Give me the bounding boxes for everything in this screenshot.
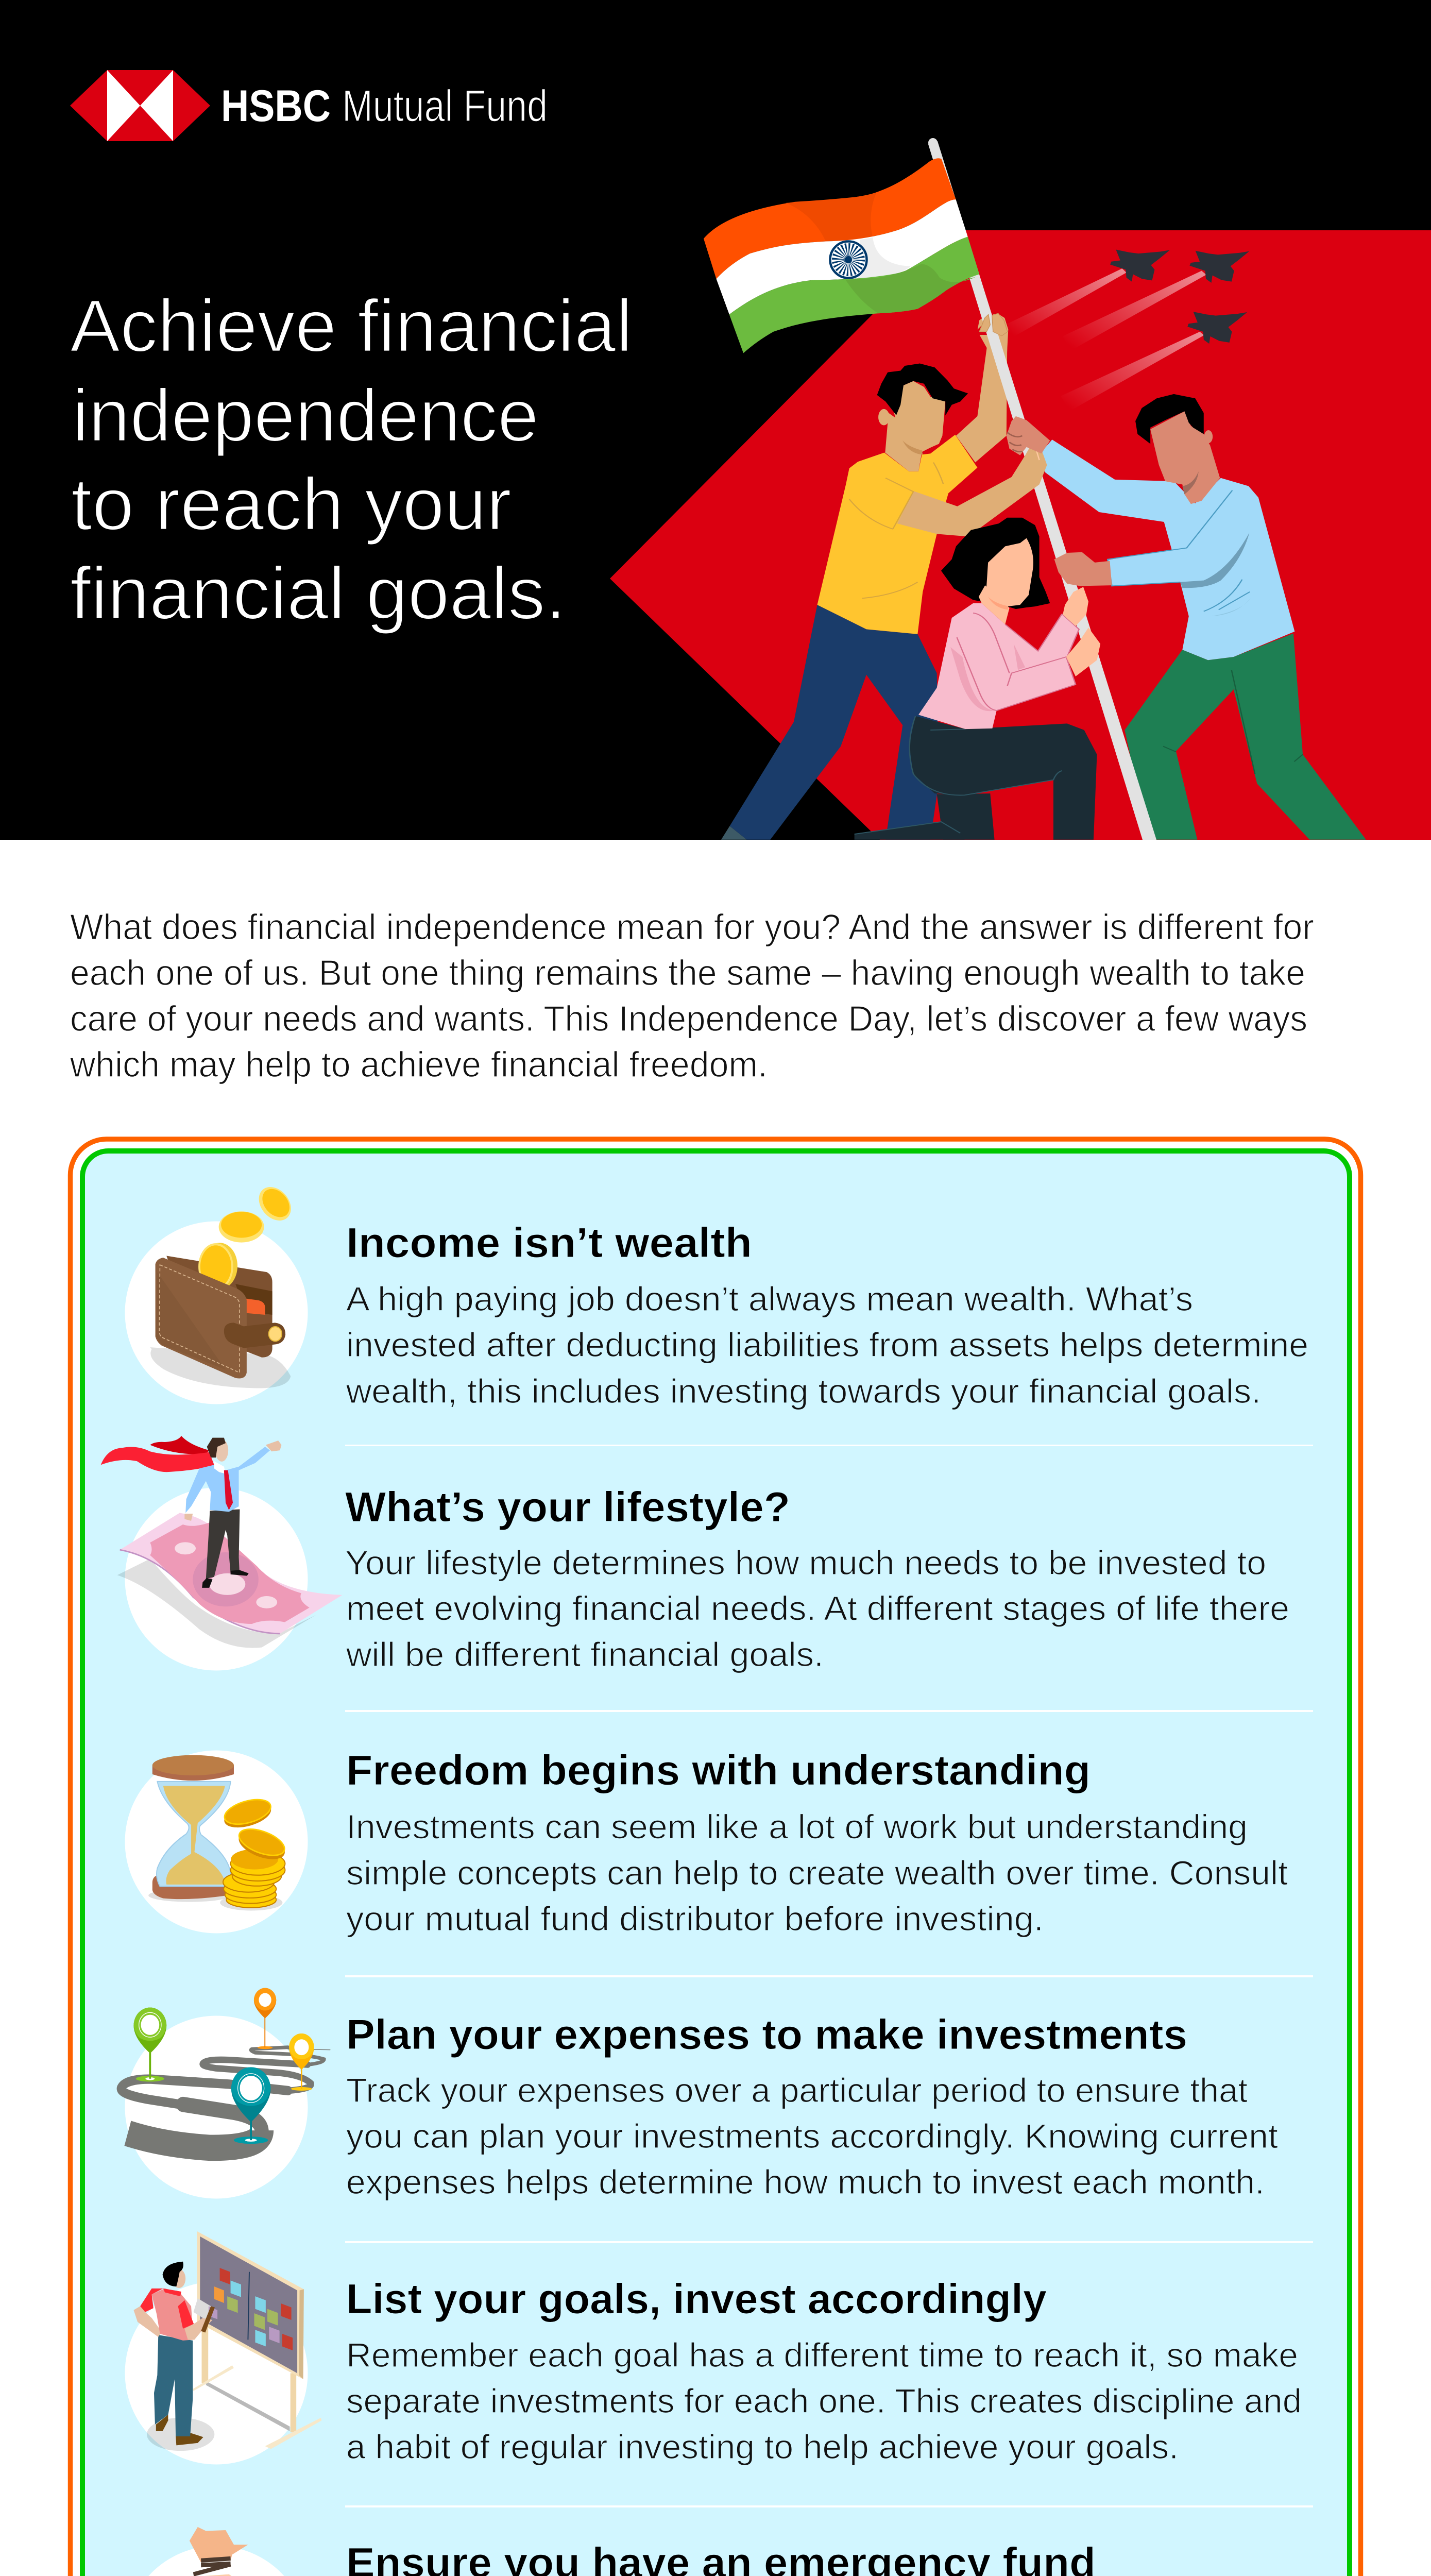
panel: tips with tricolour border — [70, 1139, 1361, 2576]
illustration: Indian flag — [704, 158, 979, 353]
heading and text: Freedom begins with understanding: Freedom begins with understanding — [346, 1747, 1091, 1794]
heading and text: Plan your expenses — [346, 2011, 1278, 2201]
divider 4 — [345, 2241, 1313, 2243]
logo: wordmark: Mutual Fund — [342, 81, 548, 131]
title: financial goals. — [70, 552, 566, 635]
illustration: man in blue shirt — [1042, 394, 1366, 840]
pin teal — [231, 2067, 270, 2144]
hero red hexagon shape — [610, 230, 1431, 840]
icon: money bag on lifebuoy — [139, 2527, 293, 2576]
heading and text: Income isn't wealth — [346, 1219, 1308, 1410]
heading and text: Income isn't wealth: Income isn’t wealth — [346, 1219, 752, 1266]
heading and text: Plan your expenses: expenses helps determine how much to invest each month. — [346, 2163, 1265, 2201]
divider 3 — [345, 1975, 1313, 1977]
panel green inner border and fill — [82, 1151, 1350, 2576]
heading and text: Income isn't wealth: A high paying job doesn’t always mean wealth. What’s — [346, 1280, 1193, 1318]
heading and text: Plan your expenses: you can plan your investments accordingly. Knowing current — [346, 2117, 1278, 2155]
pin green — [133, 2008, 166, 2081]
divider 2 — [345, 1710, 1313, 1712]
heading and text: What's your lifestyle?: meet evolving financial needs. At different stages of life there — [346, 1589, 1289, 1627]
heading and text: List your goals — [346, 2276, 1302, 2466]
icon: man looking at goal board — [133, 2231, 321, 2451]
logo: HSBC hexagon — [70, 70, 210, 141]
intro paragraph — [70, 907, 1314, 1084]
logo: wordmark — [221, 81, 548, 131]
icon: superhero businessman on banknote — [101, 1436, 342, 1648]
icon circle backgrounds — [125, 1221, 308, 2576]
title: to reach your — [71, 463, 512, 546]
heading and text: Income isn't wealth: wealth, this includes investing towards your financial goals. — [346, 1372, 1261, 1410]
title — [70, 284, 633, 635]
illustration: fighter jets with trails — [1008, 250, 1249, 411]
intro paragraph: which may help to achieve financial freedom. — [70, 1044, 768, 1084]
illustration: flag pole — [928, 141, 1156, 840]
heading and text: What's your lifestyle?: What’s your lifestyle? — [345, 1484, 790, 1531]
illustration: man in yellow shirt — [721, 335, 1007, 840]
icon: hourglass with coins — [148, 1755, 288, 1910]
icon: Ashoka Chakra wheel — [830, 241, 866, 278]
heading and text: Freedom begins with understanding: your mutual fund distributor before investing. — [346, 1900, 1044, 1938]
divider 5 — [345, 2505, 1313, 2507]
pin yellow — [289, 2033, 314, 2091]
heading and text: What's your lifestyle? — [345, 1484, 1289, 1673]
heading and text: Income isn't wealth: invested after deducting liabilities from assets helps determine — [346, 1326, 1308, 1364]
illustration: hands and arms on pole — [885, 416, 1112, 586]
intro paragraph: each one of us. But one thing remains the same – having enough wealth to take — [70, 953, 1305, 993]
heading and text: Plan your expenses: Track your expenses over a particular period to ensure that — [346, 2071, 1248, 2109]
heading and text: Freedom begins with understanding: Investments can seem like a lot of work but understanding — [346, 1807, 1248, 1845]
pin orange — [254, 1988, 276, 2049]
logo: wordmark: HSBC — [221, 81, 331, 131]
heading and text: Freedom begins with understanding — [346, 1747, 1288, 1938]
heading and text: What's your lifestyle?: Your lifestyle determines how much needs to be invested to — [345, 1544, 1266, 1582]
heading and text: Plan your expenses: Plan your expenses to make investments — [346, 2011, 1187, 2058]
hero black background — [0, 0, 1431, 840]
heading and text: List your goals: a habit of regular investing to help achieve your goals. — [346, 2428, 1179, 2466]
panel orange outer border — [70, 1139, 1361, 2576]
heading and text: List your goals: Remember each goal has a different time to reach it, so make — [346, 2336, 1298, 2374]
heading and text: List your goals: separate investments for each one. This creates discipline and — [346, 2382, 1302, 2420]
title: Achieve financial — [70, 284, 633, 367]
illustration: raised hand behind pole — [978, 313, 1009, 352]
panel: hero header — [0, 0, 1431, 840]
divider 1 — [345, 1445, 1313, 1446]
icon: winding road with location pins — [121, 1988, 330, 2148]
icon: wallet with coins — [150, 1180, 297, 1388]
illustration: fingers over pole — [979, 313, 1008, 336]
illustration: woman in pink top — [855, 518, 1100, 840]
heading and text: Freedom begins with understanding: simple concepts can help to create wealth over time. Consult — [346, 1854, 1288, 1892]
title: independence — [72, 374, 539, 457]
heading and text: List your goals: List your goals, invest accordingly — [346, 2276, 1047, 2323]
heading and text: What's your lifestyle?: will be different financial goals. — [346, 1635, 824, 1673]
intro paragraph: care of your needs and wants. This Independence Day, let’s discover a few ways — [70, 998, 1307, 1039]
intro paragraph: What does financial independence mean for you? And the answer is different for — [70, 907, 1314, 947]
